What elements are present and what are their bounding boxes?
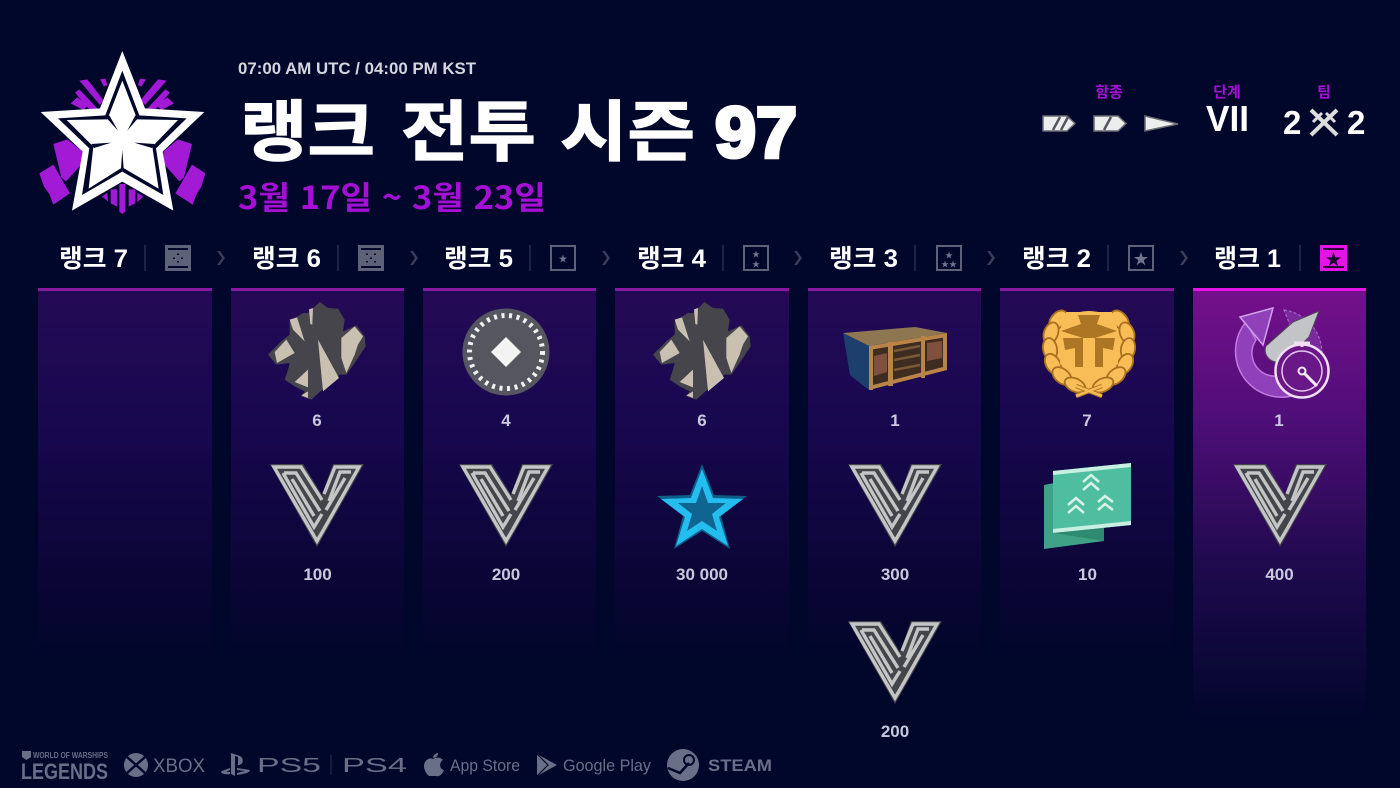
rank 2 reward 2 count: 10 — [1078, 565, 1097, 584]
rank header 4 — [637, 245, 802, 273]
footer: Legends logo — [21, 751, 109, 784]
rank header 3: 랭크 3 — [829, 245, 898, 273]
title number: 97 — [715, 94, 797, 173]
rank header 5: 랭크 5 — [444, 245, 513, 273]
rank header 7 — [59, 245, 225, 273]
icon: V medal rank 1 — [1233, 464, 1327, 547]
rank 4 reward 1 count: 6 — [697, 411, 707, 430]
icon: V medal rank 3 second — [848, 621, 942, 704]
rank header 2: ★ — [1133, 251, 1149, 268]
footer: PlayStation: PS5 — [257, 755, 321, 777]
header: team label: 팀 — [1317, 81, 1331, 102]
rank header 1: 랭크 1 — [1214, 245, 1281, 273]
panel: rank 6 — [231, 288, 404, 660]
panel: rank 4 — [615, 288, 789, 660]
rank 1 reward 2 count: 400 — [1265, 565, 1294, 584]
rank header 7: 랭크 7 — [59, 245, 128, 273]
rank header 6 — [252, 245, 418, 273]
rank 6 reward 1 count: 6 — [312, 411, 322, 430]
rank 2 reward 1 count: 7 — [1082, 411, 1092, 430]
icon: camouflage rank 6 — [268, 302, 366, 400]
footer: Xbox — [124, 753, 205, 777]
footer: PlayStation — [221, 753, 407, 777]
panel: rank 5 — [423, 288, 596, 660]
footer: Xbox: XBOX — [153, 756, 205, 777]
rank header 3: ★ — [945, 251, 953, 260]
rank 3 reward 1 count: 1 — [890, 411, 900, 430]
rank header 1 — [1214, 245, 1347, 273]
rank 1 reward 1 count: 1 — [1274, 411, 1284, 430]
team value: 2 — [1283, 104, 1301, 141]
footer: Google Play — [537, 754, 651, 776]
footer: PlayStation: PS4 — [342, 755, 407, 777]
footer: App Store — [424, 753, 520, 776]
header: tier label: 단계 — [1213, 81, 1241, 102]
title — [240, 79, 695, 175]
logo: star emblem — [39, 51, 205, 214]
icon: V medal rank 6 — [270, 464, 364, 547]
rank header 2: 랭크 2 — [1022, 245, 1091, 273]
footer: App Store: App Store — [450, 756, 520, 775]
footer: Steam — [667, 749, 772, 781]
rank 4 reward 2 count: 30 000 — [676, 565, 728, 584]
footer: Legends logo: LEGENDS — [21, 759, 108, 784]
icon: blue star — [657, 464, 747, 549]
footer: Steam: STEAM — [708, 756, 772, 775]
icon: ship class 2 — [1094, 116, 1126, 131]
footer: Google Play: Google Play — [563, 756, 651, 775]
rank 3 reward 3 count: 200 — [881, 722, 909, 741]
rank header 3 — [829, 245, 995, 273]
rank 5 reward 1 count: 4 — [501, 411, 511, 430]
icon: purple reload bullet timer — [1236, 308, 1328, 398]
panel: rank 7 — [38, 288, 212, 660]
rank header 6: 랭크 6 — [252, 245, 321, 273]
rank 3 reward 2 count: 300 — [881, 565, 909, 584]
title: 랭크 — [240, 79, 375, 175]
icon: supply crate — [843, 327, 947, 390]
tier value: VII — [1206, 98, 1249, 139]
title: 전투 — [401, 79, 536, 175]
rank header 5: ★ — [558, 254, 568, 264]
panel: rank 3 — [808, 288, 981, 660]
rank header 4: ★ — [752, 250, 760, 259]
team value: 2 — [1347, 104, 1365, 141]
team value — [1283, 104, 1365, 141]
rank header 5 — [444, 245, 610, 273]
icon: camouflage rank 4 — [653, 302, 751, 400]
rank header 4: 랭크 4 — [637, 245, 706, 273]
icon: gold laurel badge — [1041, 307, 1137, 396]
icon: green flag — [1044, 463, 1131, 549]
icon: V medal rank 5 — [459, 464, 553, 547]
rank 6 reward 2 count: 100 — [303, 565, 332, 584]
title: 시즌 — [560, 79, 695, 175]
icon: V medal rank 3 first — [848, 464, 942, 547]
icon: ship class 1 — [1043, 116, 1075, 131]
footer: Legends logo: WORLD OF WARSHIPS — [33, 751, 109, 760]
rank header 2 — [1022, 245, 1188, 273]
header: ship class label: 함종 — [1095, 81, 1123, 102]
icon: ship class 3 — [1145, 116, 1178, 131]
rank 5 reward 2 count: 200 — [492, 565, 520, 584]
rank header 3: ★★ — [941, 260, 957, 269]
time line: 07:00 AM UTC / 04:00 PM KST — [238, 60, 476, 78]
panel: rank 2 — [1000, 288, 1174, 660]
rank header 4: ★ — [752, 260, 760, 269]
date range: 3월 17일 ~ 3월 23일 — [238, 173, 546, 219]
rank header 1: ★ — [1325, 252, 1342, 269]
panel: rank 1 — [1193, 288, 1366, 723]
icon: signal disc rank 5 — [462, 308, 550, 396]
